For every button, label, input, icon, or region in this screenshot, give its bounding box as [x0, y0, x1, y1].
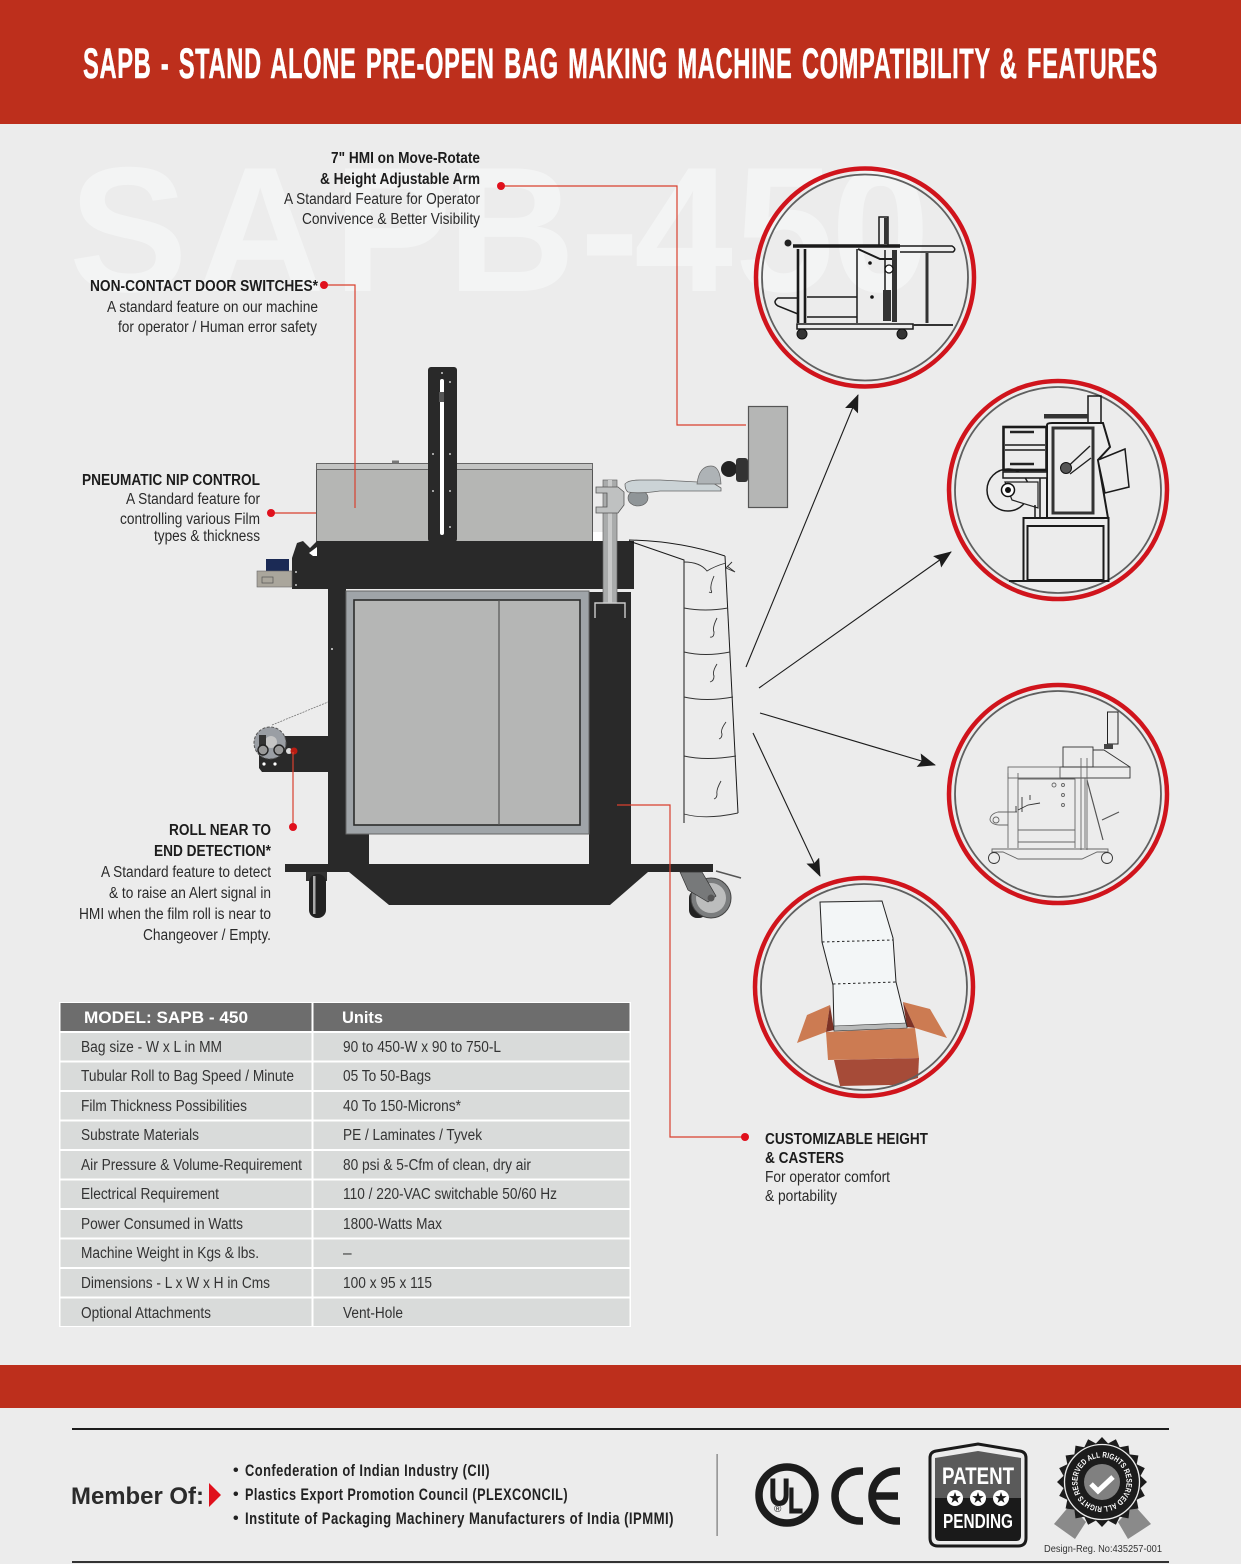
icon: rights reserved seal	[1054, 1437, 1151, 1539]
table rows: Machine Weight in Kgs & lbs.	[81, 1245, 259, 1262]
HMI screen	[748, 406, 788, 508]
circle: side view with table	[756, 168, 974, 386]
callout: height and casters	[617, 805, 928, 1205]
table header	[60, 1003, 630, 1031]
black upper frame	[257, 541, 634, 589]
callout: roll near to end: & to raise an Alert signal in	[109, 885, 271, 902]
table rows: 90 to 450-W x 90 to 750-L	[343, 1039, 501, 1056]
callout: HMI: A Standard Feature for Operator	[284, 191, 480, 208]
member list: Plastics Export Promotion Council (PLEXCONCIL)	[245, 1485, 568, 1504]
callout: roll near to end: ROLL NEAR TO	[169, 822, 271, 839]
member list: Institute of Packaging Machinery Manufacturers of India (IPMMI)	[245, 1509, 674, 1528]
callout: height and casters: & CASTERS	[765, 1150, 844, 1167]
tower and top cover	[316, 367, 603, 542]
callout: HMI: & Height Adjustable Arm	[320, 171, 480, 188]
table rows: Electrical Requirement	[81, 1186, 220, 1203]
member list	[233, 1461, 674, 1528]
table rows: Air Pressure & Volume-Requirement	[81, 1157, 303, 1174]
table rows: Film Thickness Possibilities	[81, 1098, 247, 1115]
callout: door switches: NON-CONTACT DOOR SWITCHES*	[90, 278, 319, 295]
circle: line drawing side view	[949, 685, 1167, 903]
table rows	[60, 1033, 630, 1326]
legs and base	[259, 589, 713, 905]
machine front view	[254, 367, 788, 918]
callout: roll near to end: HMI when the film roll is near to	[79, 906, 271, 923]
circle: front view with unwinder	[949, 381, 1167, 599]
callout: height and casters: & portability	[765, 1188, 837, 1205]
member list: •	[233, 1486, 239, 1503]
table rows: 05 To 50-Bags	[343, 1068, 431, 1085]
table rows: Optional Attachments	[81, 1305, 211, 1322]
table rows: 40 To 150-Microns*	[343, 1098, 461, 1115]
footer membership	[71, 1428, 1169, 1563]
film roll unwinder	[254, 702, 328, 766]
table rows: 80 psi & 5-Cfm of clean, dry air	[343, 1157, 531, 1174]
table header: Units	[342, 1009, 383, 1027]
icon: CE mark	[835, 1471, 900, 1521]
callout: door switches	[90, 278, 355, 508]
member list: Confederation of Indian Industry (CII)	[245, 1461, 490, 1480]
spec table	[59, 1002, 631, 1327]
callout: HMI: Convivence & Better Visibility	[302, 211, 480, 228]
arrows to compatibility circles	[746, 395, 951, 876]
callout: door switches: A standard feature on our machine	[107, 299, 318, 316]
callout: height and casters: For operator comfort	[765, 1169, 891, 1186]
circle: bag chain in box	[755, 878, 973, 1096]
member list: •	[233, 1462, 239, 1479]
icon: UL mark: U	[769, 1472, 790, 1514]
table rows: 100 x 95 x 115	[343, 1275, 432, 1292]
table rows: Bag size - W x L in MM	[81, 1039, 222, 1056]
callout: roll near to end: A Standard feature to detect	[101, 864, 272, 881]
callout: nip control: A Standard feature for	[126, 491, 260, 508]
icon: UL mark	[759, 1467, 815, 1523]
callout: roll near to end: Changeover / Empty.	[143, 927, 271, 944]
table rows: PE / Laminates / Tyvek	[343, 1127, 482, 1144]
table rows: Vent-Hole	[343, 1305, 403, 1322]
table header: MODEL: SAPB - 450	[84, 1009, 248, 1027]
table rows: 110 / 220-VAC switchable 50/60 Hz	[343, 1186, 557, 1203]
callout: HMI: 7" HMI on Move-Rotate	[331, 150, 480, 167]
callout: door switches: for operator / Human error safety	[118, 319, 317, 336]
icon: UL mark: ®	[774, 1504, 782, 1515]
formed bag chain	[629, 540, 738, 823]
callout: nip control	[82, 472, 316, 545]
HMI arm and pole	[595, 458, 748, 618]
table rows: Power Consumed in Watts	[81, 1216, 243, 1233]
casters	[306, 871, 741, 918]
table rows: Substrate Materials	[81, 1127, 199, 1144]
callout: height and casters: CUSTOMIZABLE HEIGHT	[765, 1131, 928, 1148]
icon: patent pending badge: PENDING	[943, 1511, 1013, 1533]
icon: patent pending badge: PATENT	[942, 1463, 1014, 1490]
icon: patent pending badge	[930, 1444, 1026, 1546]
header banner	[0, 0, 1241, 124]
callout: roll near to end: END DETECTION*	[154, 843, 272, 860]
member list: •	[233, 1510, 239, 1527]
callout: roll near to end	[79, 752, 297, 944]
table rows: Tubular Roll to Bag Speed / Minute	[81, 1068, 294, 1085]
design registration note: Design-Reg. No:435257-001	[1044, 1544, 1162, 1555]
table rows: –	[343, 1245, 352, 1262]
callout: nip control: PNEUMATIC NIP CONTROL	[82, 472, 260, 489]
table rows: 1800-Watts Max	[343, 1216, 442, 1233]
cabinet door	[346, 591, 589, 834]
callout: nip control: controlling various Film	[120, 511, 260, 528]
icon: UL mark: L	[788, 1480, 803, 1521]
member of label: Member Of:	[71, 1483, 204, 1510]
table rows: Dimensions - L x W x H in Cms	[81, 1275, 270, 1292]
callout: nip control: types & thickness	[154, 528, 260, 545]
red footer band	[0, 1365, 1241, 1408]
icon: rights reserved seal: RIGHTS RESERVED ALL RIGHTS RESERVED ALL	[1072, 1452, 1132, 1512]
watermark model name: SAPB-450	[69, 130, 930, 329]
callout: HMI	[284, 150, 746, 425]
